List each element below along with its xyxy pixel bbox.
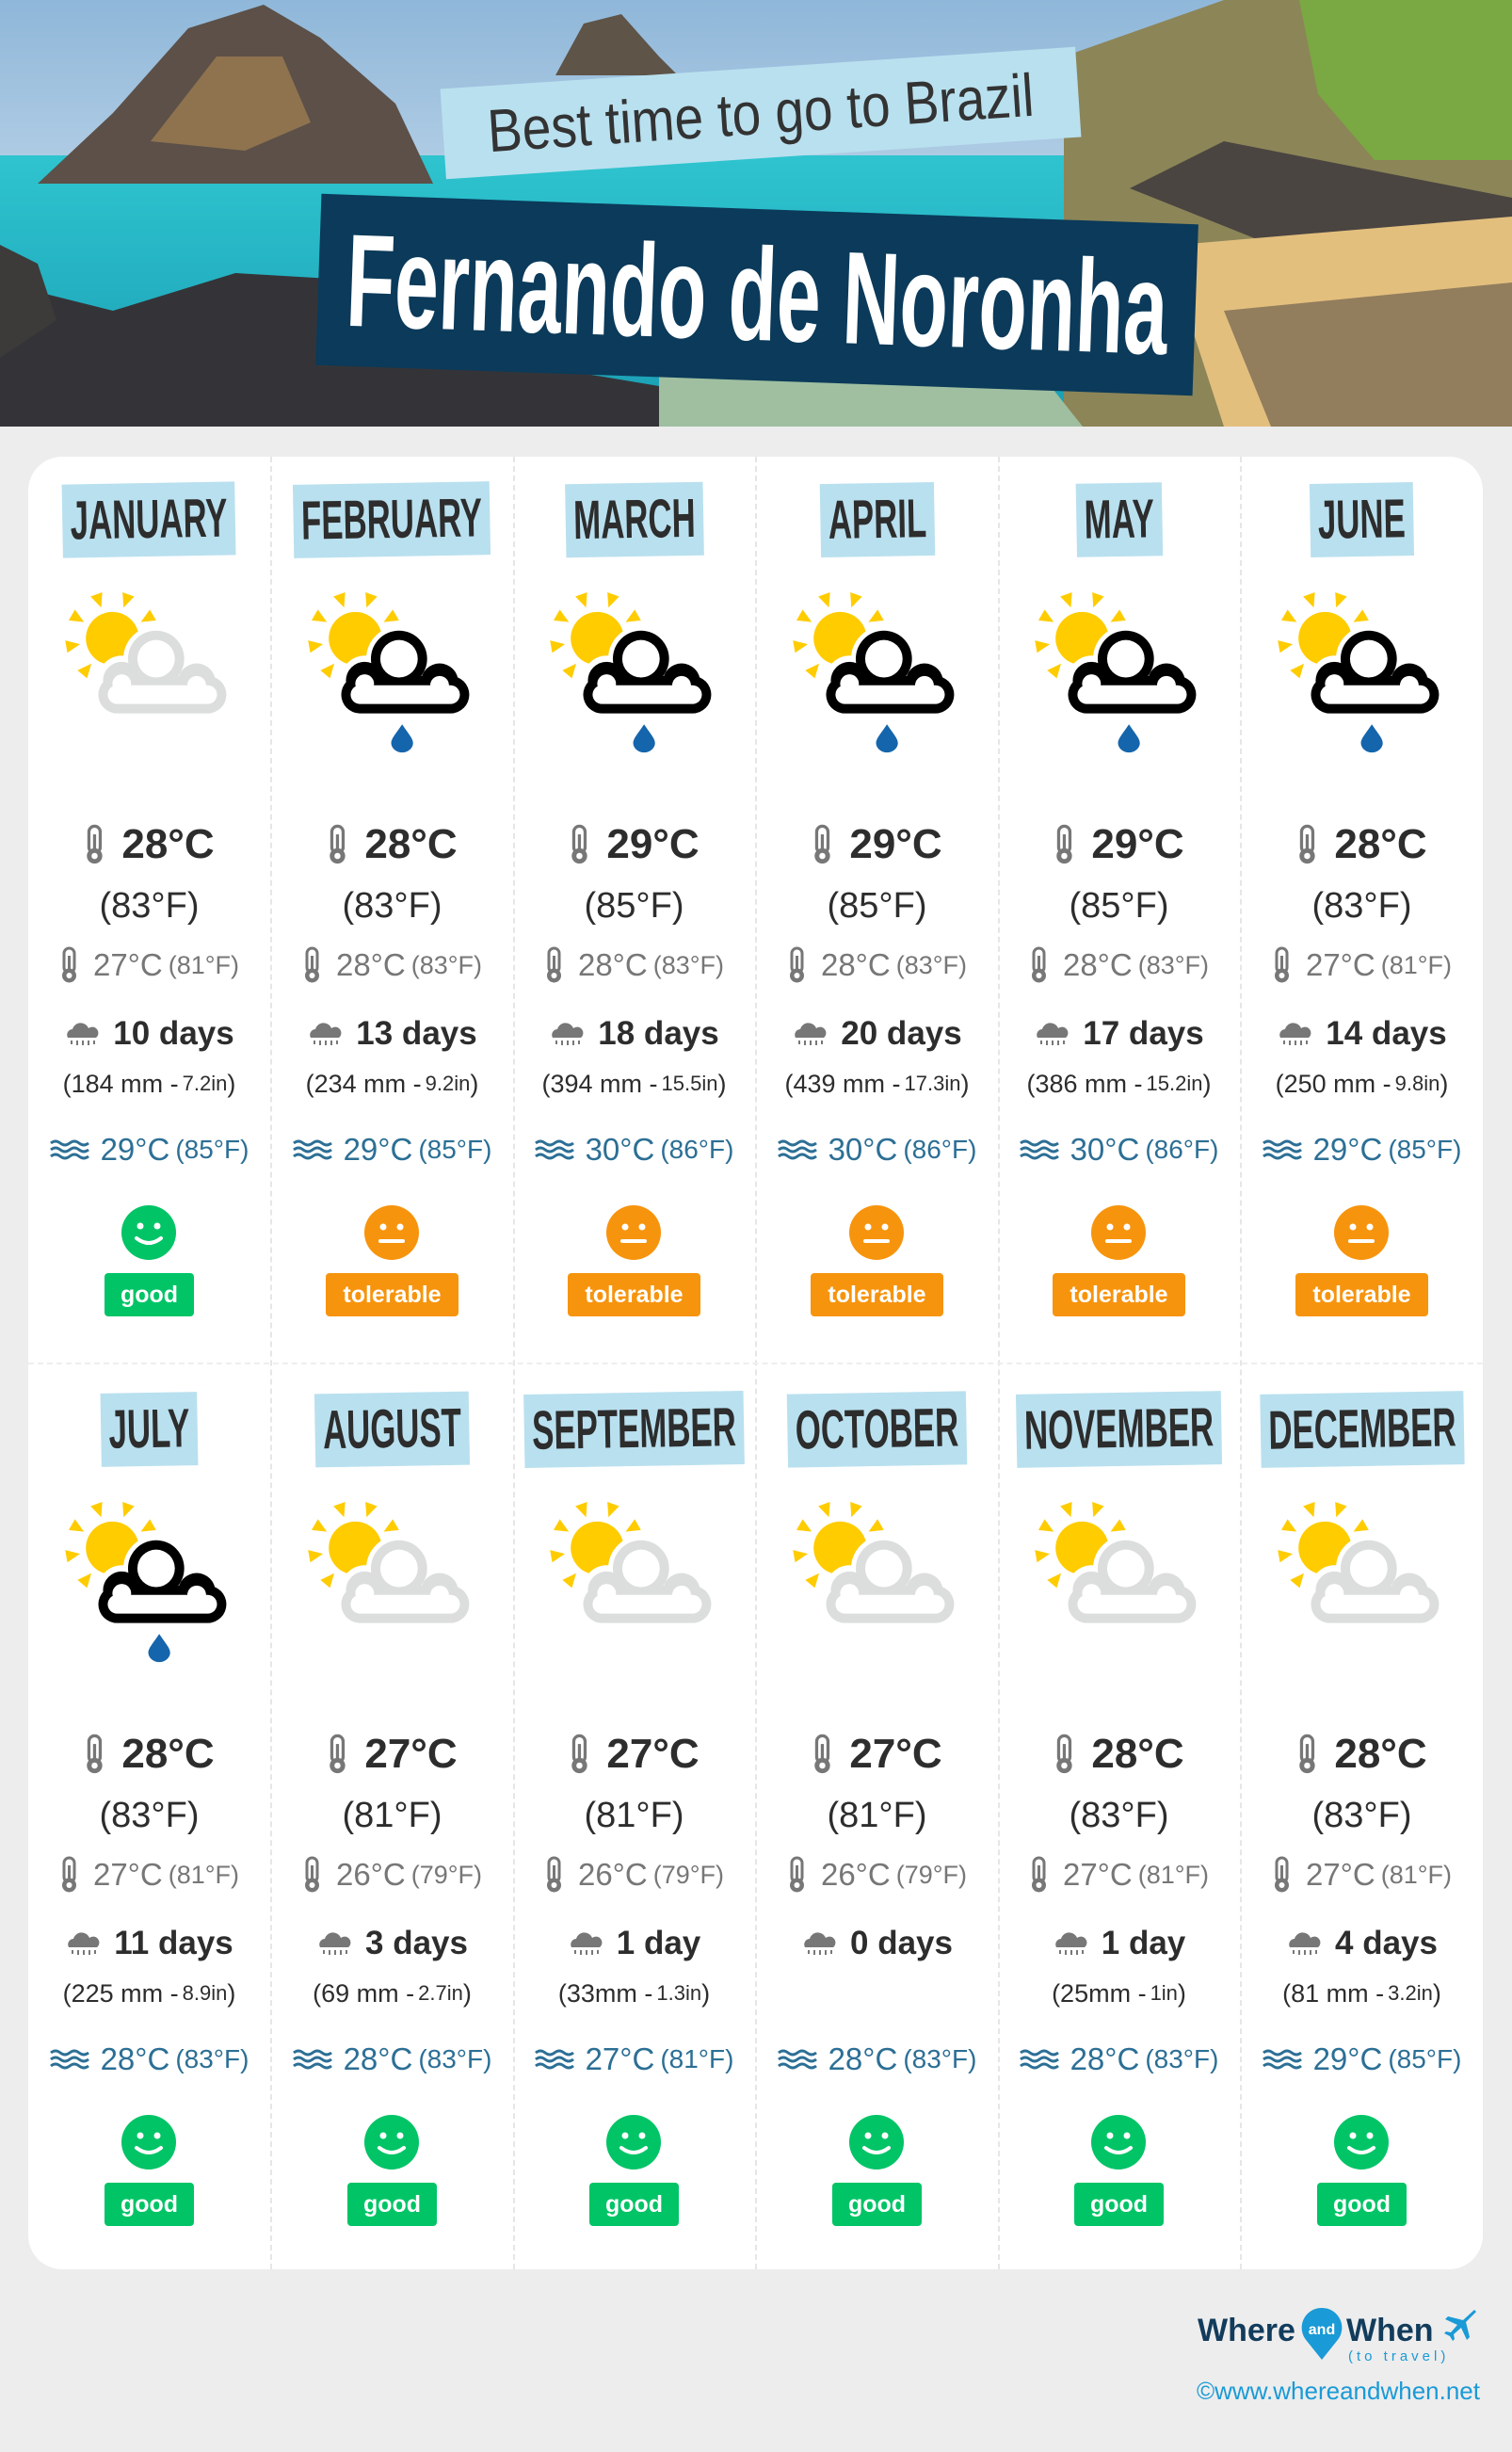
month: June: JUNE xyxy=(1318,488,1406,551)
month: December: (85°F) xyxy=(1388,2044,1461,2073)
month: January: (85°F) xyxy=(175,1135,249,1164)
icon: map pin xyxy=(1301,2308,1343,2360)
month: May: 28°C xyxy=(1063,947,1133,982)
month: January: (83°F) xyxy=(100,885,199,925)
month: April: (83°F) xyxy=(896,951,967,979)
month: April: 29°C xyxy=(849,821,942,867)
month: December: (81 mm - ) xyxy=(1282,1979,1441,2008)
month: August: (81°F) xyxy=(343,1795,442,1834)
month: February xyxy=(293,481,491,1316)
month: September: 1.3in xyxy=(656,1981,701,2005)
month: December: 4 days xyxy=(1335,1925,1438,1961)
month: December: DECEMBER xyxy=(1267,1396,1456,1461)
month: December: 29°C xyxy=(1313,2041,1382,2076)
month: April xyxy=(778,482,976,1316)
month: May: 17 days xyxy=(1083,1015,1204,1052)
month: April: (86°F) xyxy=(903,1135,976,1164)
month: January: (184 mm - ) xyxy=(63,1070,235,1098)
month: September: 26°C xyxy=(578,1857,648,1892)
month: March: (86°F) xyxy=(660,1135,733,1164)
month: February: tolerable xyxy=(343,1282,442,1308)
subtitle box: Best time to go to Brazil: Best time to go to Brazil xyxy=(486,61,1036,165)
month: November: 1in xyxy=(1150,1981,1178,2005)
month: February: 13 days xyxy=(356,1015,477,1052)
month: September: good xyxy=(605,2191,663,2218)
month: September: 1 day xyxy=(617,1925,700,1961)
month: October: 0 days xyxy=(850,1925,953,1961)
month: April: (85°F) xyxy=(827,885,926,925)
month: November: (83°F) xyxy=(1145,2044,1218,2073)
footer url: ©www.whereandwhen.net xyxy=(1197,2377,1480,2405)
month: December: 28°C xyxy=(1334,1731,1427,1777)
month: November: 27°C xyxy=(1063,1857,1133,1892)
month: March: (83°F) xyxy=(653,951,724,979)
month: December: (83°F) xyxy=(1312,1795,1411,1834)
month: February: 29°C xyxy=(344,1132,412,1167)
month: November xyxy=(1016,1391,1222,2226)
month: March: 30°C xyxy=(586,1132,654,1167)
month: July: JULY xyxy=(108,1397,190,1460)
month: March xyxy=(535,482,733,1316)
month: February: 28°C xyxy=(364,821,458,867)
month: August: 3 days xyxy=(365,1925,468,1961)
subtitle box: Best time to go to Brazil xyxy=(441,47,1081,179)
month: April: 28°C xyxy=(821,947,891,982)
logo: Where and When: (to travel) xyxy=(1348,2348,1449,2364)
month: May: 29°C xyxy=(1091,821,1184,867)
month: July: 27°C xyxy=(93,1857,163,1892)
title box: Fernando de Noronha: Fernando de Noronha xyxy=(344,206,1170,382)
month: September xyxy=(523,1391,745,2226)
month: November: 28°C xyxy=(1070,2041,1139,2076)
month: July: 28°C xyxy=(101,2041,169,2076)
month: February: 9.2in xyxy=(426,1072,470,1095)
month: September: 27°C xyxy=(606,1731,700,1777)
month: September: (81°F) xyxy=(660,2044,733,2073)
logo: Where and When xyxy=(1198,2308,1476,2364)
month: May: (85°F) xyxy=(1070,885,1168,925)
logo: Where and When: Where xyxy=(1198,2313,1295,2348)
month: November: 1 day xyxy=(1102,1925,1185,1961)
month: April: tolerable xyxy=(828,1282,926,1308)
icon: map pin: and xyxy=(1309,2322,1335,2338)
month: November: (83°F) xyxy=(1070,1795,1168,1834)
month: August: AUGUST xyxy=(322,1397,462,1460)
icon: plane xyxy=(1444,2310,1476,2341)
month: September: SEPTEMBER xyxy=(532,1396,736,1461)
month: January xyxy=(50,481,249,1316)
month: July: 8.9in xyxy=(183,1981,227,2005)
month: June: (85°F) xyxy=(1388,1135,1461,1164)
month: December: 3.2in xyxy=(1388,1981,1433,2005)
month: June: tolerable xyxy=(1312,1282,1411,1308)
month: March: MARCH xyxy=(572,488,696,551)
month: October: OCTOBER xyxy=(795,1396,959,1461)
month: June: 14 days xyxy=(1326,1015,1447,1052)
month: November: NOVEMBER xyxy=(1023,1396,1214,1461)
month: September: (33mm - ) xyxy=(558,1979,710,2008)
month: March: 18 days xyxy=(598,1015,719,1052)
month: August: (79°F) xyxy=(411,1861,482,1889)
month: August: 26°C xyxy=(336,1857,406,1892)
month: August: (83°F) xyxy=(418,2044,491,2073)
month: July: 11 days xyxy=(114,1925,233,1961)
month: February: (85°F) xyxy=(418,1135,491,1164)
month: April: APRIL xyxy=(828,488,926,551)
month: July: 28°C xyxy=(121,1731,215,1777)
month: March: (85°F) xyxy=(584,885,684,925)
month: July xyxy=(50,1392,249,2226)
month: June: (81°F) xyxy=(1381,951,1452,979)
month: October: good xyxy=(848,2191,906,2218)
month: August: (69 mm - ) xyxy=(313,1979,472,2008)
month: January: JANUARY xyxy=(70,488,229,551)
month: February: FEBRUARY xyxy=(301,487,483,552)
month: January: 10 days xyxy=(113,1015,234,1052)
month: November: 28°C xyxy=(1091,1731,1184,1777)
month: May: 15.2in xyxy=(1147,1072,1202,1095)
month: August: 2.7in xyxy=(418,1981,463,2005)
month: May xyxy=(1020,482,1218,1316)
month: July: good xyxy=(121,2191,178,2218)
month: June: 9.8in xyxy=(1395,1072,1440,1095)
month: May: tolerable xyxy=(1070,1282,1168,1308)
month: October: (81°F) xyxy=(827,1795,926,1834)
month: August: 28°C xyxy=(344,2041,412,2076)
month: December: good xyxy=(1333,2191,1391,2218)
month: May: (386 mm - ) xyxy=(1026,1070,1211,1098)
month: August: 27°C xyxy=(364,1731,458,1777)
month: December: 27°C xyxy=(1306,1857,1375,1892)
month: November: good xyxy=(1090,2191,1148,2218)
month: July: (83°F) xyxy=(175,2044,249,2073)
month: December xyxy=(1260,1391,1465,2226)
month: October: (83°F) xyxy=(903,2044,976,2073)
month: June: 29°C xyxy=(1313,1132,1382,1167)
month: October xyxy=(778,1391,976,2226)
month: January: 28°C xyxy=(121,821,215,867)
month: March: tolerable xyxy=(585,1282,684,1308)
month: August xyxy=(293,1392,491,2226)
month: January: good xyxy=(121,1282,178,1308)
month: January: (81°F) xyxy=(169,951,239,979)
month: May: 30°C xyxy=(1070,1132,1139,1167)
month: April: (439 mm - ) xyxy=(785,1070,969,1098)
month: June xyxy=(1263,482,1461,1316)
logo: Where and When: When xyxy=(1346,2313,1434,2348)
panel: monthly climate card xyxy=(28,457,1483,2269)
month: June: 28°C xyxy=(1334,821,1427,867)
month: October: 26°C xyxy=(821,1857,891,1892)
month: November: (25mm - ) xyxy=(1052,1979,1186,2008)
month: May: MAY xyxy=(1084,488,1154,551)
month: June: 27°C xyxy=(1306,947,1375,982)
month: February: (234 mm - ) xyxy=(306,1070,478,1098)
month: February: 28°C xyxy=(336,947,406,982)
month: October: 27°C xyxy=(849,1731,942,1777)
month: February: (83°F) xyxy=(343,885,442,925)
month: March: 28°C xyxy=(578,947,648,982)
month: April: 30°C xyxy=(828,1132,897,1167)
month: October: 28°C xyxy=(828,2041,897,2076)
month: February: (83°F) xyxy=(411,951,482,979)
month: October: (79°F) xyxy=(896,1861,967,1889)
month: July: (83°F) xyxy=(100,1795,199,1834)
month: June: (83°F) xyxy=(1312,885,1411,925)
month: May: (83°F) xyxy=(1138,951,1209,979)
month: July: (81°F) xyxy=(169,1861,239,1889)
month: January: 7.2in xyxy=(183,1072,227,1095)
month: January: 29°C xyxy=(101,1132,169,1167)
header photo xyxy=(0,0,1512,427)
month: November: (81°F) xyxy=(1138,1861,1209,1889)
month: April: 17.3in xyxy=(905,1072,960,1095)
month: June: (250 mm - ) xyxy=(1276,1070,1448,1098)
month: March: 29°C xyxy=(606,821,700,867)
month: July: (225 mm - ) xyxy=(63,1979,235,2008)
month: December: (81°F) xyxy=(1381,1861,1452,1889)
month: May: (86°F) xyxy=(1145,1135,1218,1164)
month: September: (79°F) xyxy=(653,1861,724,1889)
month: April: 20 days xyxy=(841,1015,962,1052)
month: March: (394 mm - ) xyxy=(542,1070,726,1098)
month: March: 15.5in xyxy=(662,1072,717,1095)
month: August: good xyxy=(363,2191,421,2218)
month: January: 27°C xyxy=(93,947,163,982)
month: September: 27°C xyxy=(586,2041,654,2076)
month: September: (81°F) xyxy=(584,1795,684,1834)
